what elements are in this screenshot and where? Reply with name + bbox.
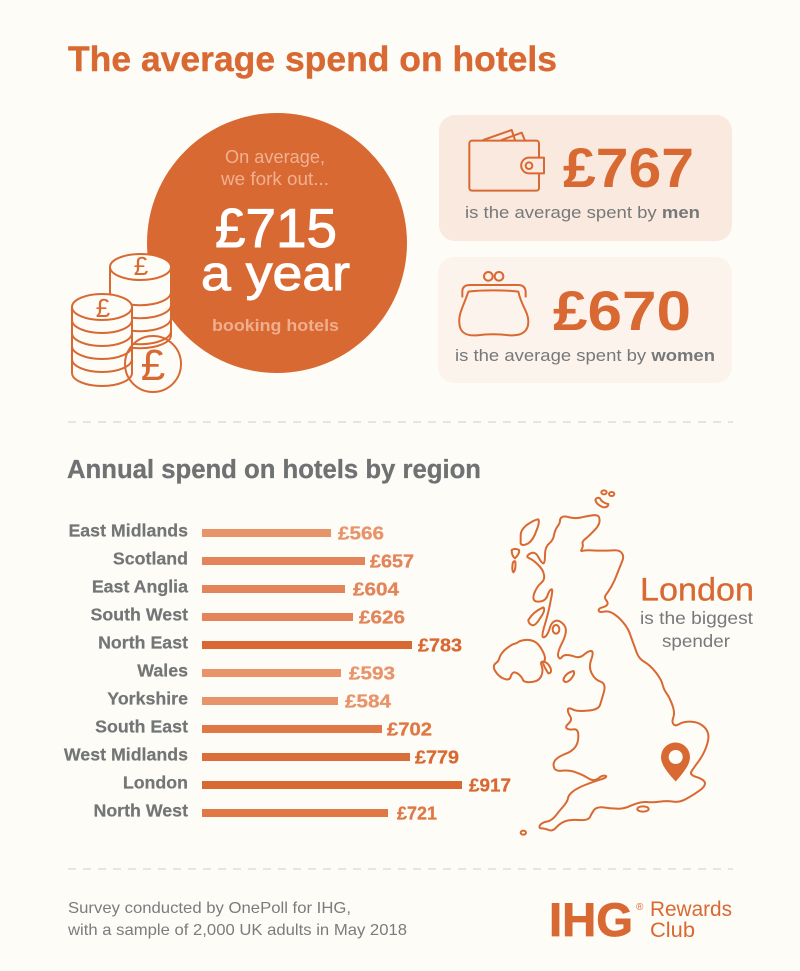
London: London [640, 572, 754, 608]
row: South East [95, 716, 432, 740]
callout caption [640, 608, 753, 651]
front coin pound sign: £ [96, 293, 111, 323]
women background [438, 257, 732, 383]
intro text [220, 147, 329, 189]
IHG wordmark: IHG [549, 893, 633, 946]
source note: Survey conducted by OnePoll for IHG, [68, 900, 351, 917]
row: West Midlands: West Midlands [64, 744, 188, 764]
row: North East: North East [98, 632, 188, 652]
row: South West: South West [91, 604, 188, 624]
Rewards: Rewards [650, 898, 732, 921]
row: South West [91, 604, 405, 628]
women caption: is the average spent by women [455, 346, 715, 365]
panel: women [438, 257, 732, 383]
row: South East: £702 [387, 718, 432, 740]
callout caption: is the biggest [640, 608, 753, 628]
row: North East: £783 [418, 634, 462, 656]
single coin [125, 336, 181, 392]
row: London: £917 [469, 774, 511, 796]
icon: purse [459, 272, 528, 335]
men figure: £767 [563, 136, 694, 199]
orange circle [147, 113, 407, 373]
row: Wales [137, 660, 395, 684]
bar chart: spend by region [64, 520, 511, 824]
intro text: we fork out... [220, 169, 329, 189]
row: North West: North West [93, 800, 188, 820]
row: South West: £626 [359, 606, 405, 628]
headline figure: £715 [215, 197, 337, 259]
row: London [123, 772, 511, 796]
logo: IHG Rewards Club [549, 893, 732, 946]
row: East Anglia: £604 [353, 578, 400, 600]
front coin stack [72, 294, 132, 386]
back coin stack [110, 254, 171, 348]
single coin pound sign: £ [141, 341, 165, 390]
panel: overall average circle [147, 113, 407, 373]
row: London: London [123, 772, 188, 792]
islands [512, 490, 649, 835]
callout caption: spender [662, 631, 730, 651]
row: Yorkshire: Yorkshire [107, 688, 188, 708]
icon: London map pin [661, 742, 690, 782]
callout: London biggest spender [640, 572, 754, 651]
booking hotels: booking hotels [212, 316, 339, 335]
row: West Midlands: £779 [415, 746, 459, 768]
row: North West [93, 800, 437, 824]
source note: with a sample of 2,000 UK adults in May 2018 [67, 922, 407, 939]
source note [67, 900, 407, 939]
icon: coin stacks [72, 251, 181, 392]
registered mark: ® [636, 902, 644, 913]
row: North East [98, 632, 462, 656]
women figure: £670 [553, 279, 691, 342]
row: East Midlands [68, 520, 384, 544]
Northern Ireland [494, 640, 545, 682]
icon: wallet [469, 130, 544, 191]
row: North West: £721 [397, 802, 437, 824]
row: East Anglia [92, 576, 400, 600]
row: Scotland [113, 548, 414, 572]
heading: regions: Annual spend on hotels by region [67, 456, 481, 484]
row: Scotland: £657 [370, 550, 414, 572]
Great Britain mainland [527, 515, 708, 830]
row: Yorkshire [107, 688, 392, 712]
a year: a year [201, 247, 350, 301]
row: East Midlands: £566 [338, 522, 384, 544]
row: East Anglia: East Anglia [92, 576, 188, 596]
back coin pound sign: £ [134, 251, 149, 281]
row: Scotland: Scotland [113, 548, 188, 568]
men background [439, 115, 732, 241]
intro text: On average, [225, 147, 325, 167]
row: Wales: £593 [349, 662, 395, 684]
row: Wales: Wales [137, 660, 188, 680]
map: United Kingdom outline [494, 490, 708, 835]
row: South East: South East [95, 716, 188, 736]
Club: Club [650, 919, 695, 942]
men caption: is the average spent by men [465, 203, 700, 222]
row: East Midlands: East Midlands [68, 520, 188, 540]
panel: men [439, 115, 732, 241]
title: The average spend on hotels [68, 40, 557, 79]
row: Yorkshire: £584 [345, 690, 392, 712]
row: West Midlands [64, 744, 459, 768]
